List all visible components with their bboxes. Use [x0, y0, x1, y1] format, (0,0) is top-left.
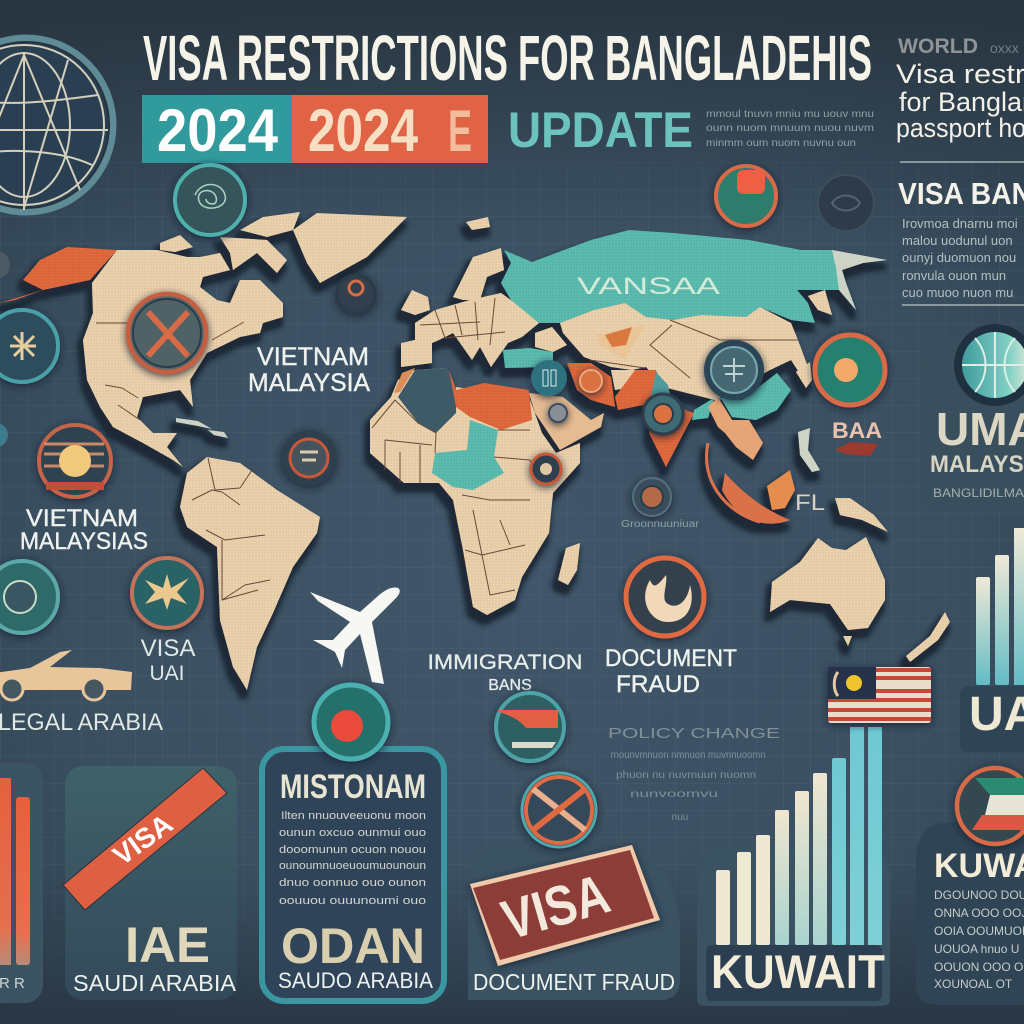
card text: dooomunun ocuon nouou	[279, 844, 426, 856]
label: Vietnam Malaysia map: MALAYSIA	[248, 369, 370, 397]
block: policy change text: POLICY CHANGE	[608, 725, 780, 742]
Asia	[503, 290, 832, 467]
icon: Kuwait flag badge	[957, 768, 1024, 844]
small map label FL: FL	[795, 490, 825, 515]
year badge: orange: 2024	[308, 97, 419, 164]
year badge: teal: 2024	[157, 97, 279, 164]
Oman label: ODAN	[281, 918, 425, 974]
icons: map markers	[531, 340, 764, 484]
panel: right header text: cuo muoo nuon mu	[902, 285, 1013, 300]
icon: dark map marker Greenland	[337, 275, 375, 313]
header small text: ounn nuom mnuum nuou nuvm	[706, 123, 874, 134]
Madagascar	[558, 543, 580, 585]
document fraud label: DOCUMENT FRAUD	[473, 969, 675, 995]
label: document fraud	[605, 645, 737, 698]
icon: round badge squiggle	[175, 165, 245, 235]
header small text: mmoul tnuvn mniu mu uouv mnu	[706, 109, 874, 120]
world map	[0, 212, 950, 690]
panel: right header text: Visa restri	[896, 59, 1024, 89]
North America	[0, 212, 300, 467]
icon: prohibition over North America	[128, 294, 206, 372]
text: XOUNOAL OT	[934, 977, 1013, 991]
block: policy change text	[608, 725, 780, 823]
Saudi Arabia label: SAUDI ARABIA	[73, 970, 237, 996]
icon: green badge left	[0, 561, 58, 633]
banner: visa	[63, 768, 227, 910]
label: document fraud: DOCUMENT	[605, 645, 737, 672]
panel: orange bars left	[0, 763, 43, 1003]
icon: dark map marker Atlantic	[281, 430, 337, 486]
label: Vietnam Malaysia map	[248, 343, 370, 397]
Kuwait label: KUWAIT	[711, 945, 885, 998]
bar chart	[976, 528, 1024, 685]
block: policy change text: nuu	[672, 812, 688, 823]
icon: Bangladesh flag badge right	[815, 335, 885, 405]
block: policy change text: nunvoomvu	[630, 789, 718, 800]
label: Vietnam Malaysia left: MALAYSIAS	[20, 528, 148, 555]
panel: right header text: ounyj duomuon nou	[902, 250, 1016, 265]
block: policy change text: rnounvmnuon nmnuon muvnnuoomn	[610, 750, 766, 761]
label: immigration bans: BANS	[488, 677, 532, 694]
year badge: orange: E	[448, 99, 472, 164]
icon: flag badge center	[496, 693, 564, 761]
text: UOUOA hnuo U	[934, 942, 1019, 956]
icon: partial edge badges	[0, 251, 10, 447]
Australia	[770, 537, 885, 630]
Papua New Guinea	[835, 498, 888, 532]
Saudi Arabia label: SAUDO ARABIA	[278, 968, 433, 993]
IAE label: IAE	[125, 917, 210, 973]
Russia	[501, 230, 887, 323]
card heading: MISTONAM	[280, 768, 426, 806]
label: BAA	[832, 418, 882, 456]
card text: dnuo oonnuo ouo ounon	[279, 877, 426, 889]
panel: visa stamp and document fraud	[468, 845, 680, 1000]
label: Vietnam Malaysia left	[20, 505, 148, 555]
label: ocean caption: Groonnuuniuar	[621, 519, 700, 530]
bar chart	[716, 727, 882, 945]
panel: right header text: oxxx	[990, 40, 1019, 56]
update label: UPDATE	[508, 102, 693, 158]
stamp: visa: VISA	[495, 861, 616, 952]
panel: right chart UAE	[960, 528, 1024, 752]
icon: globe	[954, 324, 1024, 406]
card text: ounun oxcuo ounmui ouo	[279, 827, 426, 839]
Africa	[370, 368, 580, 615]
panel: Kuwait chart	[697, 727, 890, 1006]
panel: Kuwait right card	[916, 822, 1024, 1005]
panel: right header text	[896, 35, 1024, 305]
card text: Ilten nnuouveeuonu moon	[281, 810, 426, 822]
icon: airplane	[310, 587, 400, 684]
label: legal Arabia: LEGAL ARABIA	[0, 709, 163, 736]
icon: prohibition X	[522, 773, 596, 847]
block: policy change text: phuon nu nuvmuun nuomn	[616, 770, 756, 781]
icon: dark emblem top right	[818, 175, 874, 231]
panel: right Uma Malaysia: BANGLIDILMA	[933, 486, 1024, 500]
icon: star badge	[132, 558, 202, 628]
icon: Malaysia flag	[828, 667, 931, 723]
icon: globe	[0, 38, 113, 212]
icon: round badge left	[0, 310, 58, 382]
panel: Oman card	[262, 749, 444, 1001]
header small text: minmm oum nuom nuvnu oun	[706, 138, 856, 149]
Greenland	[293, 213, 407, 283]
Europe	[401, 217, 539, 367]
banner: visa: VISA	[107, 808, 178, 871]
icon: Bangladesh badge bottom	[314, 685, 388, 759]
label: immigration bans: IMMIGRATION	[428, 651, 582, 674]
panel: IAE Saudi Arabia	[63, 766, 237, 1000]
label: BAA: BAA	[832, 418, 882, 443]
panel: right header text: WORLD	[898, 35, 978, 58]
panel: right header text: ronvula ouon mun	[902, 268, 1006, 283]
label: Vietnam Malaysia left: VIETNAM	[26, 505, 138, 532]
icon: crescent badge	[626, 558, 704, 636]
South America	[180, 457, 320, 690]
label: Visa UAI	[141, 635, 195, 685]
Russia label: VANSAA	[577, 273, 720, 300]
stamp: visa	[470, 845, 660, 966]
Indonesia	[707, 428, 820, 524]
text	[934, 888, 1024, 991]
card text	[279, 810, 426, 907]
label: Visa UAI: UAI	[149, 662, 185, 685]
label: document fraud: FRAUD	[616, 671, 700, 698]
year badge: orange	[292, 95, 488, 164]
icon: Bangladesh flag badge top	[716, 166, 776, 226]
icon: sunburst flag badge	[39, 425, 111, 497]
New Zealand	[906, 612, 950, 662]
label: Vietnam Malaysia map: VIETNAM	[257, 343, 369, 371]
icon: small ocean marker	[633, 478, 671, 516]
label: immigration bans	[428, 651, 582, 694]
card text: oouuou ouuunoumi ouo	[279, 895, 426, 907]
card text: ounoumnuoeuoumuounoun	[279, 860, 426, 872]
icon: car	[0, 650, 132, 700]
panel: right header text: Irovmoa dnarnu moi	[902, 216, 1018, 231]
header small text	[706, 109, 874, 149]
panel: right Uma Malaysia	[920, 324, 1024, 512]
label: Visa UAI: VISA	[141, 635, 195, 662]
panel: right header text: malou uodunul uon	[902, 233, 1013, 248]
